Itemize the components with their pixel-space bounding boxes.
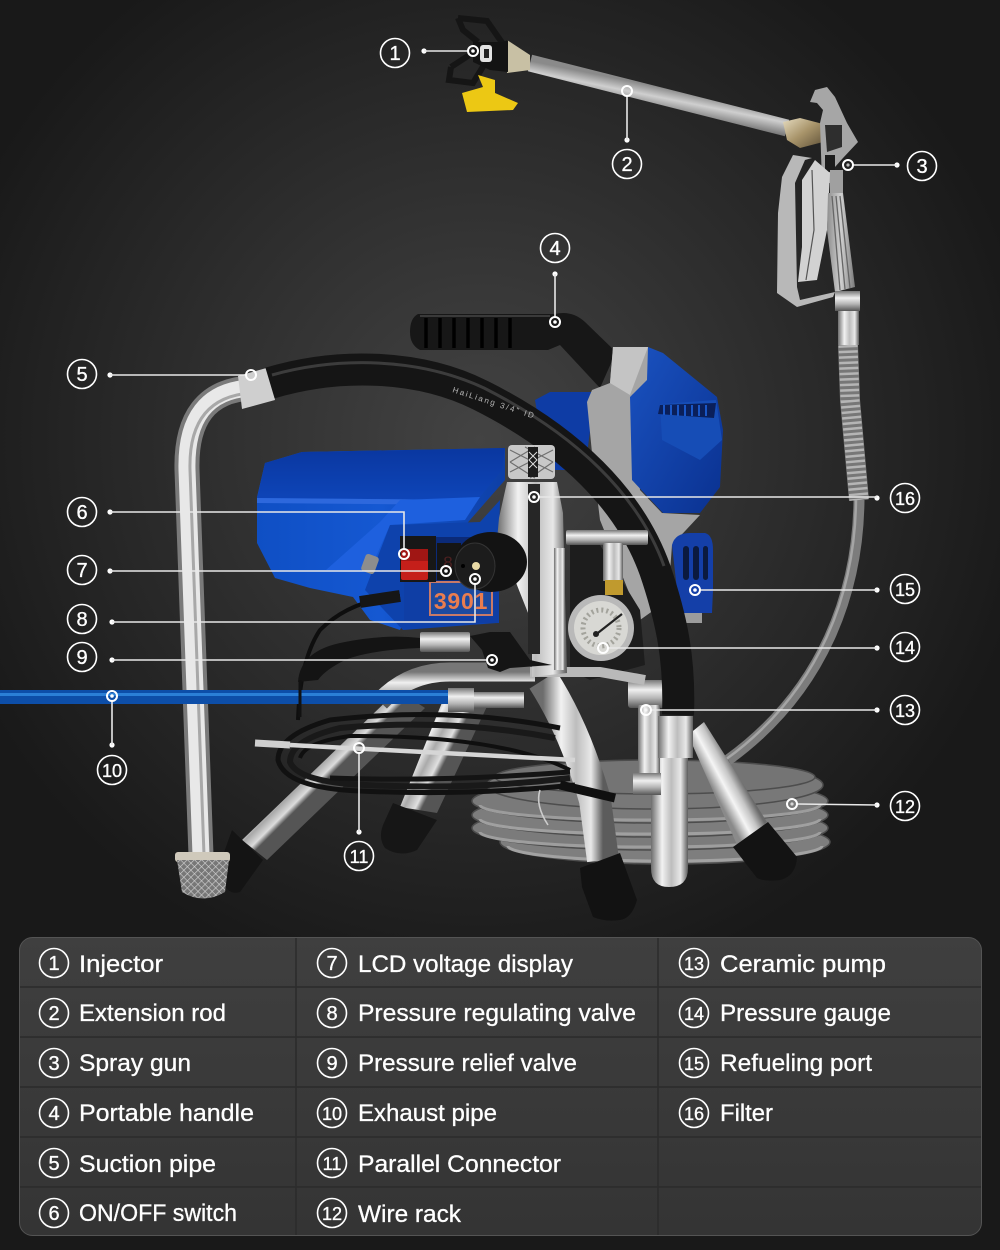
legend item 1 bbox=[40, 948, 163, 978]
legend item 10: 10 bbox=[322, 1104, 342, 1124]
legend item 14: Pressure gauge bbox=[720, 1000, 891, 1027]
tripod right leg bbox=[688, 722, 797, 881]
legend item 7: 7 bbox=[326, 953, 338, 975]
pump lower fitting bbox=[628, 680, 693, 795]
callout 8: 8 bbox=[76, 609, 88, 631]
legend item 8: Pressure regulating valve bbox=[358, 1000, 636, 1027]
legend item 9: Pressure relief valve bbox=[358, 1050, 577, 1077]
frame arches bbox=[380, 672, 645, 860]
pressure regulating valve knob bbox=[455, 532, 527, 592]
dark pump bracket bbox=[570, 545, 645, 680]
callout 7 bbox=[68, 556, 451, 584]
J tube bbox=[651, 755, 688, 887]
blue exhaust pipe bbox=[0, 688, 524, 712]
callout 6 bbox=[68, 498, 409, 559]
gray hose to gun bbox=[725, 500, 859, 760]
callout 3: 3 bbox=[916, 156, 928, 178]
legend item 2: 2 bbox=[48, 1003, 60, 1025]
legend item 8: 8 bbox=[326, 1003, 338, 1025]
callout 7: 7 bbox=[76, 560, 88, 582]
legend item 4: 4 bbox=[48, 1103, 60, 1125]
callout 11: 11 bbox=[350, 847, 368, 867]
callout 15: 15 bbox=[895, 580, 915, 600]
callout 9 bbox=[68, 642, 497, 672]
label 3901: 3901 bbox=[434, 588, 488, 614]
legend table bbox=[20, 938, 982, 1236]
callout 3 bbox=[843, 152, 936, 180]
legend item 12: 12 bbox=[322, 1204, 342, 1224]
motor housing bbox=[257, 448, 505, 630]
legend item 6: 6 bbox=[48, 1203, 60, 1225]
legend item 2: Extension rod bbox=[79, 1000, 226, 1027]
rod brass nuts bbox=[507, 40, 823, 148]
legend item 1: 1 bbox=[48, 953, 60, 975]
legend item 7: LCD voltage display bbox=[358, 951, 573, 978]
callout 4: 4 bbox=[549, 238, 561, 260]
legend item 3: 3 bbox=[48, 1053, 60, 1075]
callout 16: 16 bbox=[895, 489, 915, 509]
legend item 12 bbox=[318, 1198, 462, 1228]
tripod left leg bbox=[222, 690, 425, 893]
hose print: HaiLiang 3/4" ID bbox=[451, 385, 537, 421]
pressure gauge bbox=[568, 595, 634, 661]
control panel bbox=[400, 536, 510, 623]
callout 13: 13 bbox=[895, 701, 915, 721]
callout 14: 14 bbox=[895, 638, 915, 658]
legend item 15: 15 bbox=[684, 1054, 704, 1074]
legend item 11: 11 bbox=[323, 1154, 341, 1174]
legend item 10: Exhaust pipe bbox=[358, 1100, 497, 1127]
callout 1 bbox=[380, 38, 478, 68]
callout 9: 9 bbox=[76, 647, 88, 669]
table panel bbox=[20, 938, 982, 1236]
legend item 16 bbox=[680, 1098, 773, 1128]
legend item 5: Suction pipe bbox=[79, 1151, 216, 1178]
strainer bbox=[175, 852, 230, 898]
callout 12: 12 bbox=[895, 797, 915, 817]
legend item 3 bbox=[40, 1048, 191, 1078]
legend item 14: 14 bbox=[684, 1004, 704, 1024]
parallel connector rod bbox=[255, 743, 575, 760]
coiled gray hose bbox=[472, 760, 830, 864]
callout 16 bbox=[529, 484, 920, 512]
legend item 3: Spray gun bbox=[79, 1050, 191, 1077]
callout 14 bbox=[598, 632, 920, 662]
callout 2 bbox=[612, 86, 642, 178]
legend item 6: ON/OFF switch bbox=[79, 1200, 237, 1227]
legend item 1: Injector bbox=[79, 951, 163, 978]
callout 6: 6 bbox=[76, 502, 88, 524]
on/off switch bbox=[400, 536, 436, 582]
rear motor housing bbox=[535, 347, 723, 620]
callout 10: 10 bbox=[102, 761, 122, 781]
voltage display: 8 bbox=[443, 553, 453, 572]
legend item 5: 5 bbox=[48, 1153, 60, 1175]
callout 10 bbox=[98, 691, 126, 784]
callout 15 bbox=[690, 574, 920, 604]
callout 4 bbox=[540, 234, 570, 327]
legend item 11: Parallel Connector bbox=[358, 1151, 561, 1178]
pump body bbox=[497, 482, 567, 677]
legend item 13 bbox=[680, 948, 886, 978]
pressure relief valve bbox=[298, 632, 552, 682]
wire rack cable bundle bbox=[278, 680, 615, 825]
legend item 16: Filter bbox=[720, 1100, 773, 1127]
suction pipe bbox=[187, 367, 275, 855]
callout 13 bbox=[641, 696, 920, 724]
extension rod bbox=[530, 63, 787, 128]
callout 8 bbox=[68, 574, 480, 634]
legend item 9: 9 bbox=[326, 1053, 338, 1075]
spray gun bbox=[777, 87, 860, 345]
callout 2: 2 bbox=[621, 154, 633, 176]
callout 5: 5 bbox=[76, 364, 88, 386]
filter cap bbox=[508, 445, 555, 479]
callout 1: 1 bbox=[389, 43, 401, 65]
legend item 15: Refueling port bbox=[720, 1050, 872, 1077]
black high-pressure hose bbox=[270, 363, 678, 715]
legend item 12: Wire rack bbox=[358, 1201, 462, 1228]
front handle bbox=[410, 313, 616, 388]
product illustration: paint sprayer bbox=[0, 18, 860, 921]
front right tip bbox=[580, 853, 637, 921]
legend item 16: 16 bbox=[684, 1104, 704, 1124]
callout 12 bbox=[787, 792, 920, 820]
injector tip bbox=[449, 18, 518, 112]
rear tripod leg bbox=[381, 700, 490, 854]
T fitting bbox=[566, 530, 648, 595]
legend item 13: 13 bbox=[684, 954, 704, 974]
callout 5 bbox=[68, 360, 256, 388]
refueling port bbox=[672, 533, 713, 623]
spray gun hose spring bbox=[848, 345, 859, 500]
legend item 4: Portable handle bbox=[79, 1100, 254, 1127]
legend item 13: Ceramic pump bbox=[720, 951, 886, 978]
legend item 5 bbox=[40, 1148, 216, 1178]
power cord bbox=[298, 596, 400, 720]
callout 11 bbox=[344, 743, 374, 870]
